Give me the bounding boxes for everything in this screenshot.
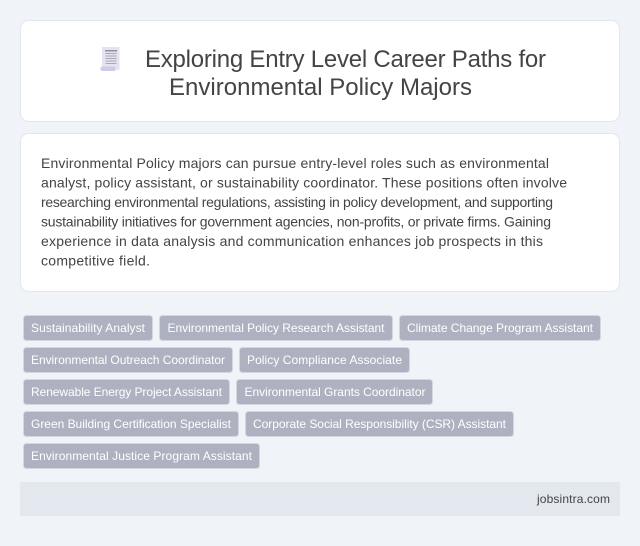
heading: Exploring Entry Level Career Paths for xyxy=(145,46,546,73)
text block: description: analyst, policy assistant, or sustainability coordinator. These positions often involve xyxy=(41,174,567,190)
text block: description: competitive field. xyxy=(41,252,150,268)
tag xyxy=(24,380,230,404)
heading: Environmental Policy Majors xyxy=(169,74,472,101)
tag xyxy=(240,348,410,372)
footer source text: jobsintra.com xyxy=(536,492,610,506)
tag xyxy=(24,444,260,468)
tag: Climate Change Program Assistant xyxy=(407,321,594,335)
tag: Renewable Energy Project Assistant xyxy=(31,385,223,399)
tag xyxy=(24,316,152,340)
tag: Green Building Certification Specialist xyxy=(31,417,232,431)
tag xyxy=(236,380,432,404)
tag: Sustainability Analyst xyxy=(31,321,146,335)
text block: description: sustainability initiatives for government agencies, non-profits, or private firms. Gaining xyxy=(41,214,551,230)
tag: Corporate Social Responsibility (CSR) Assistant xyxy=(253,417,507,431)
tag: Environmental Grants Coordinator xyxy=(244,385,426,399)
panel: career tags xyxy=(24,316,600,468)
panel: title card xyxy=(20,20,620,122)
tag xyxy=(24,348,232,372)
tag xyxy=(246,412,514,436)
tag: Environmental Justice Program Assistant xyxy=(31,449,253,463)
footer xyxy=(20,482,620,516)
tag: Policy Compliance Associate xyxy=(247,353,402,367)
tag xyxy=(160,316,392,340)
text block: description: Environmental Policy majors can pursue entry-level roles such as environmental xyxy=(41,155,549,171)
tag: Environmental Outreach Coordinator xyxy=(31,353,225,367)
tag xyxy=(24,412,238,436)
panel: description xyxy=(20,134,620,292)
text block: description: experience in data analysis and communication enhances job prospects in this xyxy=(41,233,543,249)
text block: description: researching environmental regulations, assisting in policy development, and supporting xyxy=(41,194,553,210)
tag xyxy=(400,316,600,340)
icon: paper scroll xyxy=(100,47,120,71)
tag: Environmental Policy Research Assistant xyxy=(168,321,385,335)
